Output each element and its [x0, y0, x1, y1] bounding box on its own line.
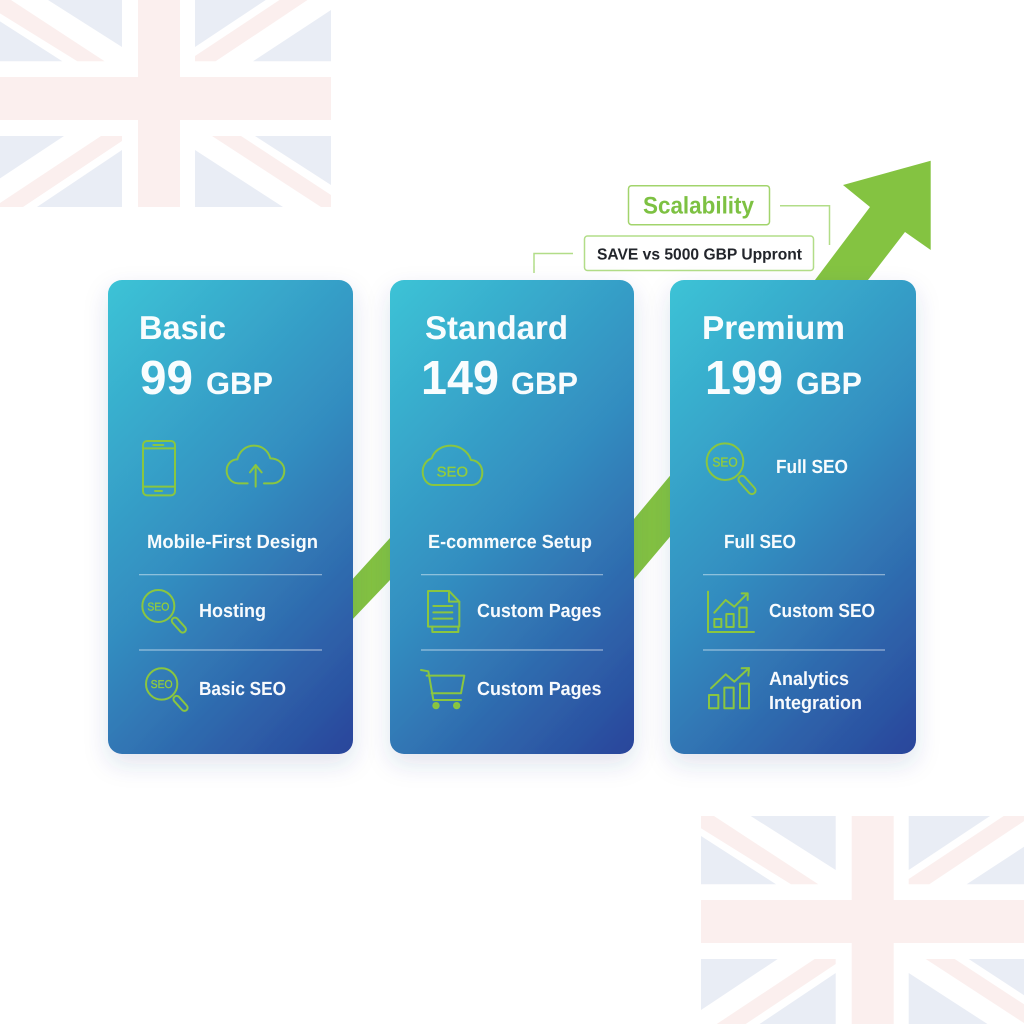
feature: custom seo: Custom SEO — [769, 601, 875, 622]
feature: e-commerce setup: E-commerce Setup — [428, 532, 592, 553]
heading: standard: Standard — [425, 309, 568, 346]
icon: cloud upload — [227, 446, 284, 487]
icon: seo magnifier: SEO — [712, 455, 738, 470]
icon: document — [428, 591, 459, 632]
feature: analytics integration: Integration — [769, 693, 862, 714]
icon: seo cloud — [423, 446, 482, 485]
feature: hosting: Hosting — [199, 601, 266, 622]
panel: standard plan — [390, 280, 634, 754]
panel: basic plan — [108, 280, 353, 754]
growth arrow — [350, 161, 931, 622]
badge: save vs upfront — [584, 236, 814, 270]
badge: scalability: Scalability — [643, 192, 755, 219]
feature: mobile-first design: Mobile-First Design — [147, 532, 318, 553]
feature: custom pages: Custom Pages — [477, 601, 602, 622]
icon: growth chart — [709, 668, 749, 708]
connector: save badge to card — [534, 254, 573, 273]
connector: scalability to arrow — [780, 206, 830, 245]
price: 149 GBP: 149 — [421, 352, 499, 405]
price: 149 GBP — [421, 352, 578, 405]
icon: seo magnifier: SEO — [147, 600, 169, 613]
feature: custom pages: Custom Pages — [477, 679, 602, 700]
icon: seo magnifier — [146, 668, 189, 712]
feature: full seo: Full SEO — [776, 457, 848, 478]
icon: seo magnifier — [707, 443, 757, 496]
feature: analytics integration — [769, 669, 862, 714]
price: 99 GBP: GBP — [206, 366, 273, 401]
heading: basic: Basic — [139, 309, 226, 346]
background flag: top left — [0, 0, 331, 207]
icon: seo magnifier — [142, 590, 187, 634]
price: 199 GBP — [705, 352, 862, 405]
heading: premium: Premium — [702, 309, 845, 346]
feature: full seo: Full SEO — [724, 532, 796, 553]
panel: premium plan — [670, 280, 916, 754]
badge: scalability — [628, 186, 770, 225]
price: 149 GBP: GBP — [511, 366, 578, 401]
icon: growth chart with axis — [708, 592, 754, 632]
icon: shopping cart — [421, 670, 464, 708]
price: 199 GBP: GBP — [796, 366, 862, 401]
badge: save vs upfront: SAVE vs 5000 GBP Uppront — [597, 246, 803, 264]
background flag: bottom right — [701, 816, 1024, 1024]
feature: analytics integration: Analytics — [769, 669, 849, 690]
feature: basic seo: Basic SEO — [199, 679, 286, 700]
price: 199 GBP: 199 — [705, 352, 783, 405]
price: 99 GBP — [140, 352, 273, 405]
price: 99 GBP: 99 — [140, 352, 193, 405]
icon: seo cloud: SEO — [437, 464, 468, 480]
icon: seo magnifier: SEO — [151, 678, 173, 691]
icon: smartphone — [143, 441, 175, 495]
